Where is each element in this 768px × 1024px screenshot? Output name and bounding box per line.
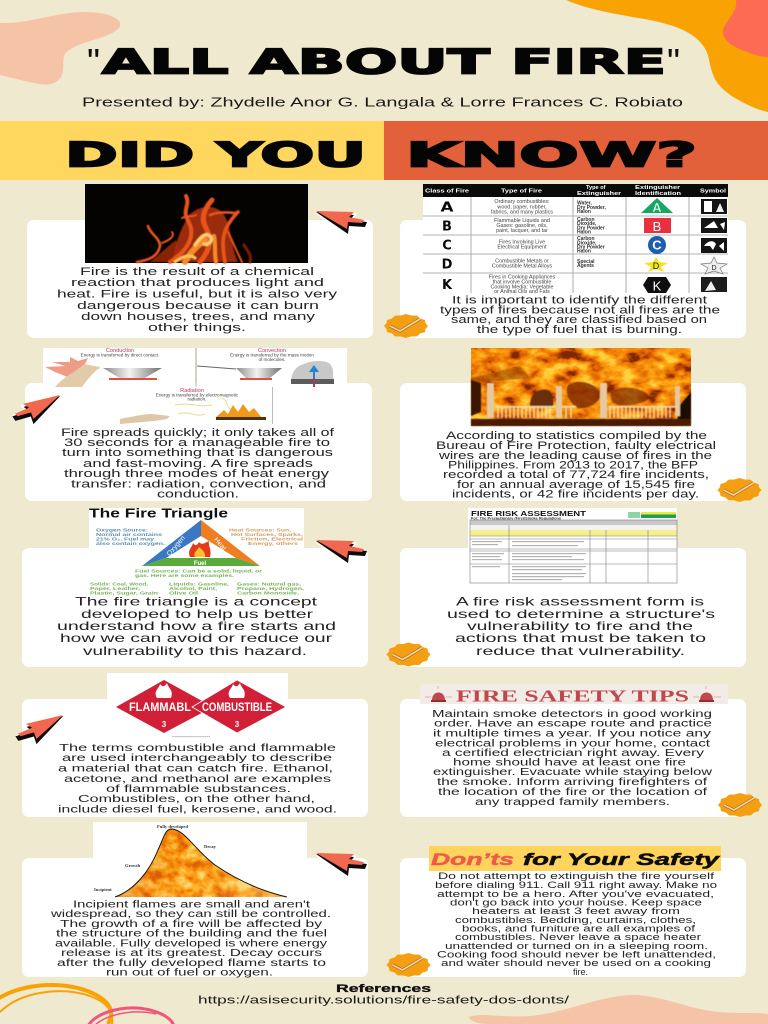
decoration: orange swirl bottom left [0,985,112,1024]
body text: the location of the fire or the location of [438,787,707,798]
diagram: fire triangle: The Fire Triangle [89,506,228,520]
body text: run out of fuel or oxygen. [106,968,273,978]
diagram: fire triangle: Paper, Leather, [90,586,140,591]
body text: widespread, so they can still be controlled. [49,909,331,920]
table: classes of fire: Type of Fire [501,188,542,194]
check badge [384,314,428,338]
card [400,220,746,338]
body text: before dialing 911. Call 911 right away. Make no [435,880,717,890]
panel: combustible vs flammable [13,673,368,817]
body text: available. Fully developed is where energy [55,938,327,950]
panel: fire statistics [400,348,762,502]
body text: The fire triangle is a concept [75,594,318,608]
body text: dangerous because it can burn [77,300,319,312]
heading: don'ts for your safety [429,846,721,871]
arrow icon [316,211,367,234]
body text: a material that can catch fire. Ethanol, [58,764,333,774]
diagram: fire triangle: Heat [212,536,227,552]
body text: the structure of the building and the fuel [56,928,327,940]
diagram: fire triangle: Plastic, Sugar, Grain [90,590,158,596]
body text: of flammable substances. [106,784,291,795]
table: classes of fire: Extinguisher [577,191,622,197]
decoration: peach blob bottom right [469,995,768,1024]
body text: through three modes of heat energy [64,468,330,480]
extinguisher symbols: K [653,278,662,294]
arrow icon [13,715,68,748]
body text: The terms combustible and flammable [59,743,337,754]
body text: The growth of a fire will be affected by [60,919,322,930]
body text [58,743,337,816]
references [198,983,569,1006]
card [22,548,368,667]
chart: fire growth curve: Decay [204,844,217,849]
diagram: conduction: Conduction [106,348,134,354]
banner: did you know [0,121,768,180]
diagram: fire triangle: Propane, Hydrogen, [237,586,304,591]
body text: According to statistics compiled by the [446,430,707,442]
card [400,699,746,817]
extinguisher symbols: D [653,261,660,271]
table: classes of fire: Electrical Equipment [497,244,547,250]
body text: and fast-moving. A fire spreads [83,458,313,470]
body text: vulnerability to this hazard. [83,644,307,658]
extinguisher symbols: B [653,219,661,234]
card [25,383,372,501]
diagram: radiation: Radiation [180,388,204,394]
table: classes of fire: Cooking Media: Vegetable [491,284,553,290]
chart: fire growth curve: Fully developed [157,824,188,829]
body text: incidents, or 42 fire incidents per day. [452,488,699,500]
body text: unattended or turned on in a sleeping room. [445,941,708,951]
table: classes of fire: B [442,220,452,234]
extinguisher symbols [641,198,727,294]
body text: order. Have an escape route and practice [434,718,713,730]
body text: Do not attempt to extinguish the fire yourself [438,871,715,881]
heading: fire safety tips: FIRE SAFETY TIPS [456,686,689,706]
diagram: radiation: radiation. [188,396,206,402]
body text: other things. [148,322,246,334]
form: fire risk assessment: For: The Precautionary (Fire)/Smoke Regulations [471,516,561,520]
diagram: fire triangle: also contain oxygen. [96,541,165,546]
image: hazard diamonds: 3 [162,720,167,729]
form: fire risk assessment: FIRE RISK ASSESSMENT [471,511,587,518]
diagram: convection: Convection [258,348,286,354]
body text: heat. Fire is useful, but it is also very [57,288,338,300]
decoration: peach blob top left [0,12,120,84]
diagram: convection: of molecules. [258,357,286,362]
photo: flames on black [85,184,308,263]
table: classes of fire: Combustible Metal Alloys [492,264,552,270]
table: classes of fire: Class of Fire [425,188,469,194]
body text: developed to help us better [81,607,313,621]
body text: It is important to identify the different [452,294,707,306]
table: classes of fire: Ordinary combustibles: [494,199,550,205]
banner: did you know: KNOW? [406,136,697,176]
body text: Philippines. From 2013 to 2017, the BFP [448,460,698,472]
panel: heat transfer [10,348,372,501]
check badge [718,793,762,817]
table: classes of fire: Special [577,259,595,265]
diagram: conduction [43,348,195,387]
body text: release is at its greatest. Decay occurs [61,948,322,959]
body text: actions that must be taken to [455,631,707,645]
card [400,858,746,977]
table: classes of fire: A [440,200,454,216]
table: classes of fire: K [442,278,453,293]
banner: did you know: DID YOU [65,136,366,176]
table: classes of fire: Halon [577,209,591,215]
body text: A fire risk assessment form is [456,594,704,608]
arrow icon [316,540,367,563]
body text [61,427,334,500]
body text: combustibles. Bedding, curtains, clothes, [455,915,696,925]
diagram: fire triangle: Fuel Sources: Can be a solid, liquid, or [135,568,262,574]
table: classes of fire: C [442,238,452,254]
table: classes of fire: wood, paper, rubber, [496,204,547,210]
body text: electrical problems in your home, contact [435,738,710,750]
table: classes of fire: Halon [577,229,591,235]
card [22,858,368,977]
body text: books, and furniture are all examples of [462,924,696,934]
body text [436,430,716,500]
heading: don'ts for your safety: Don’ts [431,850,514,869]
body text: Fire spreads quickly; it only takes all of [61,427,334,439]
card [400,383,746,501]
card [400,548,746,667]
body text: recorded a total of 77,724 fire incidents, [443,469,709,481]
body text: home should have at least one fire [453,758,687,768]
table: classes of fire [423,184,728,295]
body text: are used interchangeably to describe [62,753,333,764]
table: classes of fire: Carbon [577,217,594,223]
body text [432,709,713,808]
table: classes of fire: Identification [635,191,682,197]
diagram: fire triangle: Hot Surfaces, Sparks, [231,532,303,537]
body text: down houses, trees, and many [81,311,316,323]
diagram: fire triangle: Oxygen [166,535,187,558]
diagram: fire triangle: Energy, others [248,541,299,546]
decoration: pink swirl bottom left [88,1008,174,1024]
extinguisher symbols: A [652,200,662,215]
image: hazard diamonds: 3 [235,720,240,729]
references: References [336,983,431,995]
references: https://asisecurity.solutions/fire-safety-dos-donts/ [198,994,569,1006]
diagram: conduction: Energy is transferred by direct contact. [81,352,159,358]
panel: don'ts for your safety [386,846,746,977]
photo: burning house [471,348,691,426]
body text: Maintain smoke detectors in good working [432,709,712,720]
diagram: fire triangle: Alcohol, Paint, [169,586,217,591]
decoration: orange blob top right [566,0,768,112]
table: classes of fire: Dioxide, [577,240,597,246]
table: classes of fire: Agents [577,263,594,269]
body text: after the fully developed flame starts to [57,958,327,969]
panel: classes of fire [384,184,746,338]
diagram: fire triangle: Solids: Coal, Wood, [90,582,148,586]
table: classes of fire: Flammable Liquids and [494,218,550,224]
chart: fire growth curve: Incipient [94,887,112,892]
diagram: fire triangle: Liquids: Gasoline, [169,582,229,586]
table: classes of fire: or Animal Oils and Fats [494,289,550,295]
table: classes of fire: Carbon [577,236,594,242]
table: classes of fire: that involve Combustible [493,280,551,286]
body text: used to determine a structure's [447,607,715,621]
table: classes of fire: Dry Powder [577,244,605,250]
panel: fire safety tips [400,684,762,817]
body text [57,594,336,658]
diagram: convection: Energy is transferred by the mass motion [230,352,314,358]
card [22,699,368,817]
body text: types of fires because not all fires are the [440,304,720,316]
body text: the type of fuel that is burning. [477,324,682,336]
title: " [87,41,100,82]
diagram: fire triangle: Carbon Monoxide, [237,590,299,596]
body text: don't go back into your house. Keep space [450,898,702,908]
extinguisher symbols: D [711,265,717,272]
body text [49,900,331,978]
body text: how we can avoid or reduce our [60,631,332,645]
diagram: fire triangle: gas. Here are some examples. [135,573,234,578]
body text: it multiple times a year. If you notice any [433,728,711,740]
body text: Bureau of Fire Protection, faulty electrical [436,440,716,452]
body text [435,871,717,977]
table: classes of fire: Gases: gasoline, oils, [496,223,548,229]
table: classes of fire: fabrics, and many plastics [491,210,553,216]
body text: transfer: radiation, convection, and [71,478,326,490]
panel: stages of fire [22,822,368,978]
diagram: fire triangle: 21% O₂. Fuel may [96,536,155,542]
image: hazard diamonds: FLAMMABL [129,702,191,714]
title [87,41,680,82]
chart: fire growth curve [93,822,307,899]
body text: turn into something that is dangerous [62,447,333,459]
body text: wires are the leading cause of fires in the [438,450,712,462]
body text: fire. [573,967,588,977]
arrow icon [10,395,65,428]
table: classes of fire: Dry Powder [577,225,605,231]
body text: the smoke. Inform arriving firefighters of [437,777,707,788]
form: fire risk assessment [468,508,677,585]
table: classes of fire: Symbol [700,188,727,194]
title: " [667,41,680,82]
check badge [386,953,430,977]
body text: combustibles. Never leave a space heater [455,932,701,942]
chart: fire growth curve: Growth [125,863,141,868]
body text: any trapped family members. [475,797,670,808]
diagram: fire triangle: Olive Oil [169,590,198,596]
table: classes of fire: Water, [577,200,592,206]
table: classes of fire: Dry Powder, [577,205,607,211]
body text: same, and they are classified based on [451,314,707,326]
diagram: radiation [120,387,273,424]
panel: fire risk assessment [386,508,746,667]
heading: fire safety tips [420,684,728,706]
diagram: fire triangle: Friction, Electrical [241,536,303,542]
card [27,220,373,338]
table: classes of fire: Halon [577,248,591,254]
table: classes of fire: Extinguisher [635,185,681,191]
body text: extinguisher. Evacuate while staying below [433,767,713,778]
title: ALL ABOUT FIRE [102,42,666,82]
panel: what is fire [27,184,373,338]
diagram: fire triangle [89,506,304,597]
check badge [386,642,430,666]
subtitle: presenters: Presented by: Zhydelle Anor G. Langala & Lorre Frances C. Robiato [82,96,683,110]
body text [447,594,715,658]
body text: 30 seconds for a manageable fire to [64,437,330,449]
table: classes of fire: D [442,258,453,272]
table: classes of fire: Type of [586,185,606,191]
body text: reduce that vulnerability. [476,644,685,658]
body text: Combustibles, on the other hand, [78,794,315,805]
panel: fire triangle [22,506,368,667]
body text: Fire is the result of a chemical [80,266,314,278]
extinguisher symbols: C [652,238,662,252]
image: hazard diamonds: COMBUSTIBLE [202,702,272,714]
diagram: radiation: Energy is transferred by electromagnetic [156,392,239,398]
table: classes of fire: paint, lacquer, and tar [496,228,548,234]
body text [57,266,338,334]
body text: heaters at least 3 feet away from [472,906,680,916]
body text: reaction that produces light and [71,277,324,289]
body text: and water should never be used on a cooking [441,958,711,968]
body text: acetone, and methanol are examples [64,774,331,785]
arrow icon [316,853,367,876]
diagram: fire triangle: Gases: Natural gas, [237,582,301,586]
body text: for an annual average of 15,545 fire [457,479,695,491]
body text: include diesel fuel, kerosene, and wood. [58,804,337,816]
table: classes of fire: Dioxide, [577,221,597,227]
body text: a certified electrician right away. Every [442,748,704,759]
decoration: coral blob top right [723,0,768,57]
body text: attempt to be a hero. After you've evacuated, [437,889,714,899]
body text: understand how a fire starts and [57,619,336,633]
diagram: fire triangle: Normal air contains [96,532,163,537]
body text: Incipient flames are small and aren't [73,900,310,910]
heading: don'ts for your safety: for Your Safety [523,850,721,869]
body text: Cooking food should never be left unattended, [437,950,716,960]
body text: vulnerability to fire and the [467,619,694,633]
diagram: convection [196,348,347,387]
table: classes of fire: Combustible Metals or [495,258,549,264]
diagram: fire triangle: Oxygen Source: [96,528,149,532]
table: classes of fire: Fires in Cooking Appliances [489,274,556,280]
diagram: fire triangle: Fuel [194,561,206,567]
table: classes of fire: Fires Involving Live [499,240,545,246]
body text [440,294,720,336]
diagram: fire triangle: Heat Sources: Sun, [229,528,291,532]
image: hazard diamonds [107,673,288,741]
check badge [718,478,762,502]
body text: conduction. [157,488,239,500]
